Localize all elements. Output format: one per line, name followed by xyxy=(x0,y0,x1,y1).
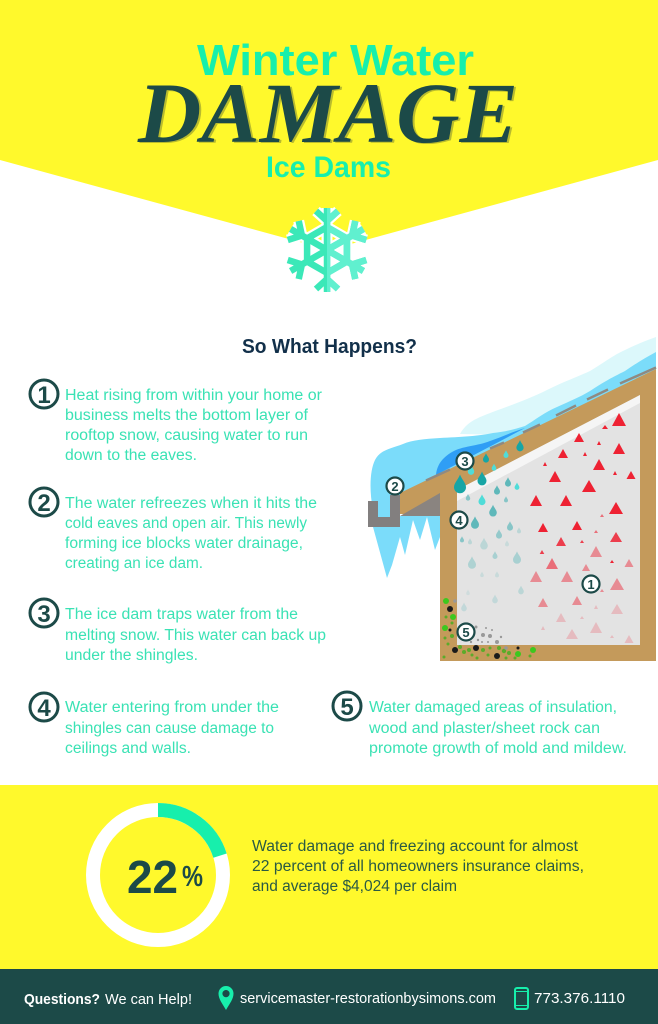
step 1 text: Heat rising from within your home or xyxy=(65,387,322,404)
diagram badge 1 xyxy=(582,576,600,592)
questions text: We can Help! xyxy=(105,991,192,1008)
title: Ice Dams xyxy=(266,151,391,184)
building frame xyxy=(400,369,656,661)
number badge 4: 4 xyxy=(37,695,51,722)
step 1 text: rooftop snow, causing water to run xyxy=(65,427,308,444)
number badge 3: 3 xyxy=(37,601,51,628)
diagram badge 2 xyxy=(386,478,404,494)
number badge 2: 2 xyxy=(37,490,51,517)
statistic text: 22 percent of all homeowners insurance claims, xyxy=(252,858,584,875)
number badge 1 xyxy=(30,380,58,409)
step 5 text: wood and plaster/sheet rock can xyxy=(368,720,600,737)
icon: phone xyxy=(515,988,528,1009)
footer bar xyxy=(0,969,658,1024)
main snow layer xyxy=(371,352,656,517)
heading: So What Happens?: So What Happens? xyxy=(242,336,417,358)
step 1 text: down to the eaves. xyxy=(65,447,197,464)
step 3 text: The ice dam traps water from the xyxy=(65,606,298,623)
diagram badge 3: 3 xyxy=(461,454,469,469)
donut chart 22%: % xyxy=(182,861,203,893)
title xyxy=(137,36,520,184)
step 3 text xyxy=(65,606,326,664)
mold and mildew xyxy=(442,598,536,660)
questions text xyxy=(24,991,192,1008)
title: DAMAGE xyxy=(137,65,518,161)
step 5 text: Water damaged areas of insulation, xyxy=(369,699,617,716)
interior wall xyxy=(457,395,640,645)
gutter xyxy=(368,495,400,527)
donut chart 22% xyxy=(93,810,223,940)
diagram badge 4 xyxy=(450,512,468,528)
insulation strip xyxy=(457,395,640,501)
number badge 3 xyxy=(30,599,58,628)
icicles xyxy=(373,516,440,578)
water drops xyxy=(454,440,524,611)
website: servicemaster-restorationbysimons.com xyxy=(240,990,496,1007)
step 5 text xyxy=(368,699,627,757)
step 5 text: promote growth of mold and mildew. xyxy=(369,740,627,757)
step 2 text: cold eaves and open air. This newly xyxy=(65,515,307,532)
step 4 text xyxy=(65,699,279,757)
donut chart 22%: 22 xyxy=(127,851,178,903)
phone number: 773.376.1110 xyxy=(534,990,625,1007)
number badge 4 xyxy=(30,693,58,722)
step 1 text: business melts the bottom layer of xyxy=(65,407,309,424)
diagram badge 5: 5 xyxy=(462,625,470,640)
shingles xyxy=(426,368,656,480)
step 3 xyxy=(30,599,326,664)
diagram badge 1: 1 xyxy=(587,577,595,592)
light top snow xyxy=(460,337,656,435)
title: DAMAGE xyxy=(139,66,520,162)
step 2 xyxy=(30,488,317,572)
diagram badge 3 xyxy=(456,452,474,470)
diagram badge 4: 4 xyxy=(455,513,463,528)
questions text: Questions? xyxy=(24,991,100,1008)
step 2 text: The water refreezes when it hits the xyxy=(65,495,317,512)
melt water under snow xyxy=(436,428,525,475)
step 4 text: Water entering from under the xyxy=(65,699,279,716)
soffit xyxy=(400,493,440,516)
number badge 2 xyxy=(30,488,58,517)
icon: snowflake xyxy=(281,208,373,292)
heat triangles xyxy=(530,413,636,643)
step 3 text: melting snow. This water can back up xyxy=(65,627,326,644)
statistic panel xyxy=(0,785,658,969)
statistic text xyxy=(252,838,584,895)
diagram badge 5 xyxy=(458,624,474,640)
step 4 text: shingles can cause damage to xyxy=(65,720,274,737)
diagram badge 2: 2 xyxy=(391,479,399,494)
statistic text: and average $4,024 per claim xyxy=(252,878,457,895)
number badge 1: 1 xyxy=(37,382,51,409)
step 1 text xyxy=(65,387,322,464)
step 4 xyxy=(30,693,279,757)
step 1 xyxy=(30,380,322,464)
statistic text: Water damage and freezing account for almost xyxy=(252,838,579,855)
number badge 5 xyxy=(333,692,361,721)
icon: location pin xyxy=(218,986,234,1010)
number badge 5: 5 xyxy=(340,694,354,721)
title: Winter Water xyxy=(197,36,474,85)
step 3 text: under the shingles. xyxy=(65,647,198,664)
step 2 text: forming ice blocks water drainage, xyxy=(65,535,303,552)
step 2 text xyxy=(65,495,317,572)
step 4 text: ceilings and walls. xyxy=(65,740,191,757)
house cross-section diagram xyxy=(368,337,656,661)
step 2 text: creating an ice dam. xyxy=(65,555,203,572)
step 5 xyxy=(333,692,627,757)
yellow header banner xyxy=(0,0,658,250)
